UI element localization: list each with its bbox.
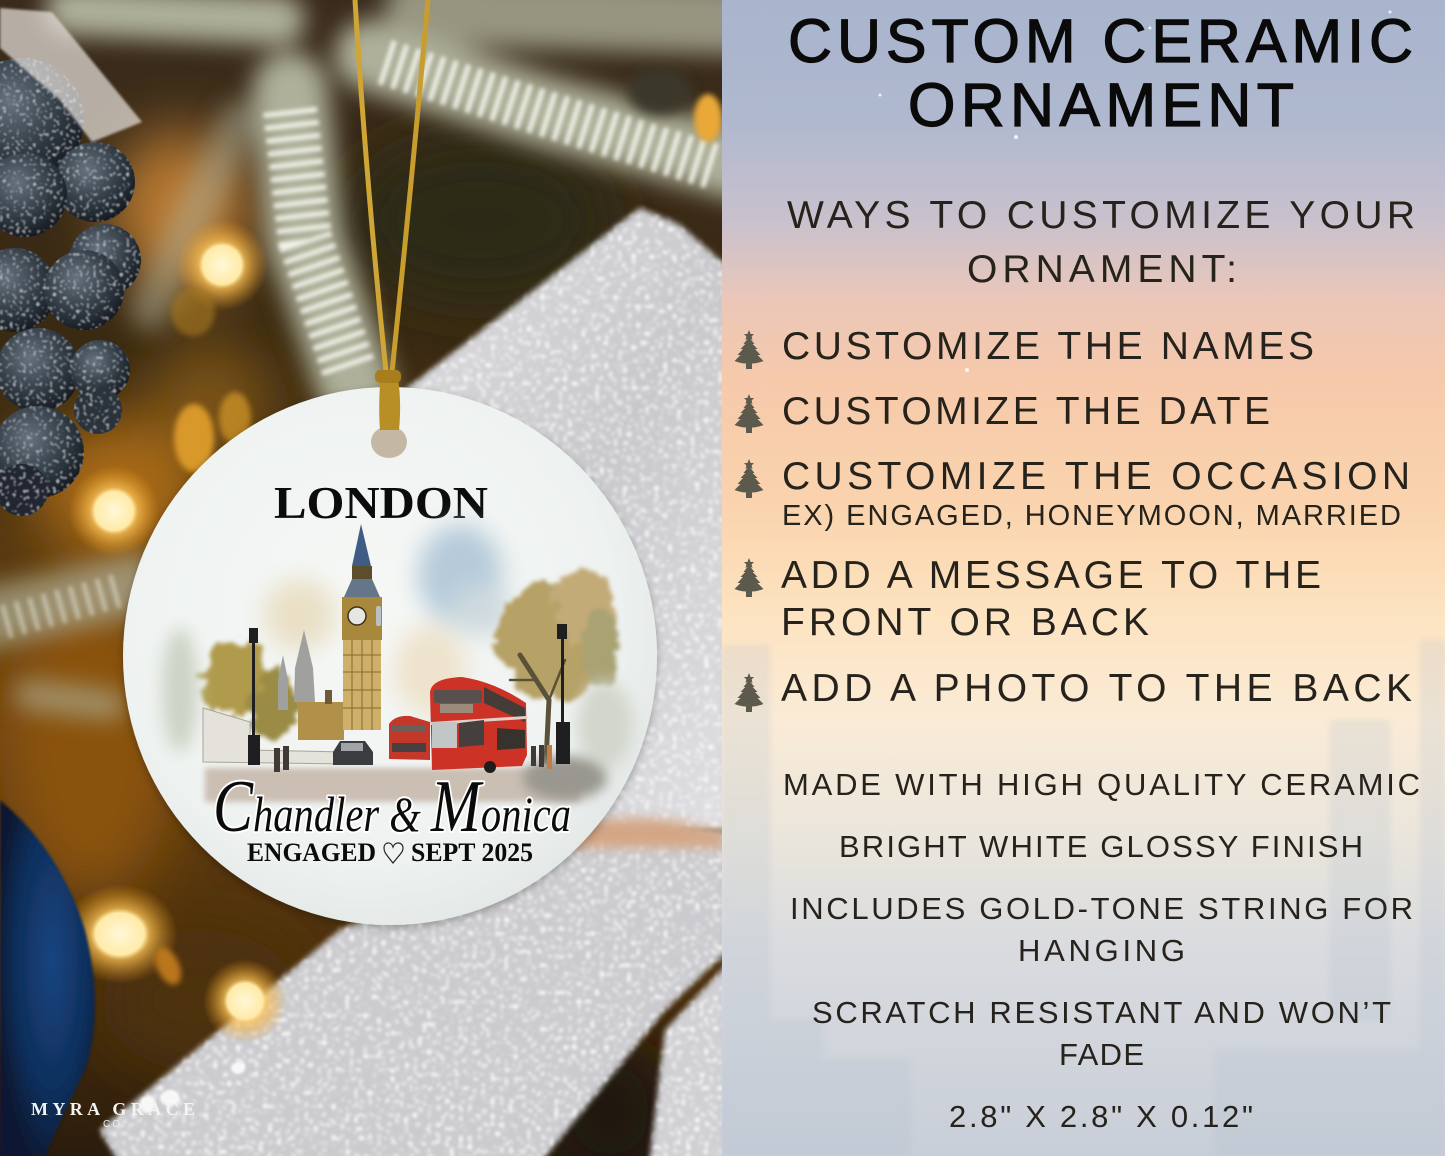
- detail: scratch resistant: FADE: [1059, 1037, 1144, 1072]
- icon: tree: [734, 330, 764, 369]
- detail: size: 2.8" X 2.8" X 0.12": [949, 1099, 1253, 1134]
- panel: description: [722, 0, 1445, 1156]
- big ben tower: [342, 524, 382, 730]
- subheading: [787, 194, 1415, 291]
- street lamps: [248, 624, 570, 765]
- distant bus: [389, 716, 430, 760]
- list: product details: [783, 767, 1420, 1134]
- watermark: [31, 1099, 195, 1130]
- panel: product photo: [0, 0, 760, 1156]
- embankment wall: [203, 708, 345, 764]
- detail: finish: BRIGHT WHITE GLOSSY FINISH: [839, 829, 1363, 864]
- title: ORNAMENT: [908, 71, 1294, 139]
- title: [788, 7, 1413, 139]
- silver glitter ribbon: [100, 208, 760, 1156]
- grey glitter baubles: [0, 58, 141, 516]
- detail: scratch resistant: SCRATCH RESISTANT AND WON’T: [812, 995, 1391, 1030]
- item: occasion examples: EX) ENGAGED, HONEYMOON, MARRIED: [782, 500, 1401, 532]
- gold string: [355, 0, 428, 372]
- red double decker bus: [430, 677, 527, 773]
- icon: heart: [384, 843, 403, 863]
- list: customization options: [734, 325, 1412, 712]
- item: message: [781, 554, 1321, 644]
- item: message: ADD A MESSAGE TO THE: [781, 554, 1321, 597]
- frosted branches: [0, 10, 760, 705]
- item: names: CUSTOMIZE THE NAMES: [782, 325, 1314, 368]
- item: date: CUSTOMIZE THE DATE: [782, 390, 1270, 433]
- detail: ceramic: MADE WITH HIGH QUALITY CERAMIC: [783, 767, 1420, 802]
- names script: Chandler & Monica: [213, 766, 571, 848]
- autumn trees: [162, 567, 633, 769]
- item: photo: ADD A PHOTO TO THE BACK: [781, 667, 1412, 710]
- watercolor london scene: [162, 524, 633, 802]
- hanging hole: [371, 426, 407, 458]
- detail: string: INCLUDES GOLD-TONE STRING FOR: [790, 891, 1413, 926]
- stars: [878, 10, 1392, 372]
- black car: [333, 741, 373, 765]
- subheading: ORNAMENT:: [967, 248, 1237, 291]
- icon: tree: [734, 673, 764, 712]
- watercolor skyline: [722, 640, 1445, 1156]
- organza ribbon: [0, 8, 142, 142]
- occasion line: SEPT 2025: [411, 838, 533, 867]
- pedestrians: [274, 745, 552, 772]
- subheading: WAYS TO CUSTOMIZE YOUR: [787, 194, 1415, 237]
- icon: tree: [734, 558, 764, 597]
- watermark: MYRA GRACE: [31, 1099, 195, 1119]
- ground and reflections: [205, 768, 580, 802]
- item: occasion: CUSTOMIZE THE OCCASION: [782, 455, 1410, 498]
- parliament: [278, 630, 344, 740]
- title: LONDON: LONDON: [274, 477, 488, 528]
- bokeh lights: [62, 94, 722, 1043]
- detail: string: HANGING: [1018, 933, 1185, 968]
- title: CUSTOM CERAMIC: [788, 7, 1413, 75]
- watermark: CO.: [103, 1119, 125, 1130]
- icon: tree: [734, 394, 764, 433]
- icon: tree: [734, 459, 764, 498]
- ceramic ornament: [123, 370, 657, 925]
- item: message: FRONT OR BACK: [781, 601, 1149, 644]
- detail: scratch resistant: [812, 995, 1391, 1072]
- occasion line: ENGAGED: [247, 838, 376, 867]
- occasion line: [247, 838, 533, 867]
- watercolor sky washes: [264, 525, 510, 715]
- string knot: [375, 370, 401, 430]
- detail: string: [790, 891, 1413, 968]
- blue glitter bauble: [0, 800, 95, 1156]
